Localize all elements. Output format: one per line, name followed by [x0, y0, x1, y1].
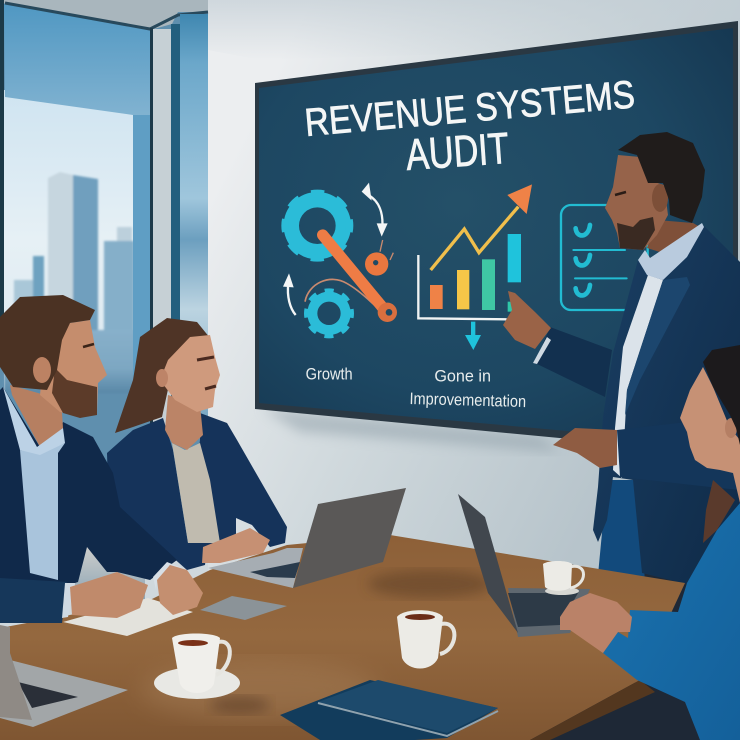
coffee cup centre [397, 610, 454, 668]
presenter neck [647, 220, 700, 253]
left woman hand [202, 528, 270, 563]
left woman eye and mouth [197, 357, 216, 389]
title: REVENUE SYSTEMS [303, 73, 637, 145]
sky through glass [4, 90, 150, 390]
presenter cuff [533, 337, 551, 364]
presenter face [605, 155, 668, 250]
label: growth: Growth [306, 364, 353, 383]
window [0, 0, 208, 563]
label: gone in: Gone in [434, 367, 491, 386]
trend line [431, 207, 518, 270]
label: improvementation: Improvementation [409, 389, 526, 411]
coffee [178, 640, 208, 646]
side reflection band [133, 115, 150, 395]
presenter collar [638, 223, 704, 280]
ceiling shadow on wall [208, 0, 740, 60]
laptop right [458, 494, 590, 637]
tablet [200, 596, 287, 620]
left man jacket [0, 387, 177, 623]
left man cuff two [153, 562, 187, 590]
table front edge [530, 680, 655, 740]
laptop keyboard [508, 593, 578, 627]
right woman lower hair [703, 480, 735, 543]
left man [0, 295, 177, 623]
presenter sleeve lower [617, 422, 740, 490]
trend arrowhead [507, 184, 532, 214]
presenter [503, 132, 740, 590]
cup body [543, 561, 572, 591]
laptop keyboard [250, 562, 300, 578]
window frame left [0, 0, 4, 320]
lower notebook [280, 680, 498, 740]
right woman hand [560, 593, 632, 653]
icon: orange nut [365, 240, 393, 276]
right woman [560, 345, 740, 740]
laptop lid [458, 494, 518, 633]
coffee cup front left [154, 634, 240, 699]
laptop base [508, 588, 590, 637]
left man neck [10, 385, 63, 447]
left man hand one [70, 572, 148, 618]
window frame top [0, 0, 208, 30]
presenter jacket [593, 225, 740, 590]
presenter beard [617, 217, 655, 250]
icon: gear connector arc [305, 279, 378, 308]
left woman ear [156, 369, 168, 387]
presenter sleeve raised [535, 327, 612, 397]
icon: curved arrows [283, 183, 388, 315]
right woman hair [703, 345, 740, 445]
icon: small gear [307, 291, 351, 336]
laptop lid [293, 488, 406, 588]
right woman face [680, 367, 740, 503]
table [0, 535, 685, 740]
saucer [154, 667, 240, 699]
presentation screen [255, 21, 738, 455]
down arrow [465, 322, 481, 350]
presenter lapel [625, 277, 690, 415]
screen surface [259, 28, 733, 446]
right woman jacket [603, 503, 740, 740]
left man collar [3, 387, 65, 455]
left man ear [33, 357, 51, 383]
left woman [107, 318, 287, 570]
window glass right [180, 14, 208, 424]
saucer [545, 587, 579, 595]
laptop keyboard [18, 682, 78, 708]
left woman neck [165, 395, 203, 450]
laptop left [0, 625, 128, 727]
city skyline [4, 172, 150, 563]
wall [208, 0, 740, 600]
screen bezel [255, 21, 738, 455]
glass overhang reflection [4, 2, 150, 118]
screen graphics [283, 183, 648, 411]
window mullion [150, 24, 180, 429]
gap under left man's arm [75, 540, 145, 600]
cup handle [216, 642, 230, 675]
cup handle [570, 566, 584, 588]
presenter hand pointing [503, 291, 551, 349]
screen shadow [262, 408, 560, 452]
icon: wrench [323, 235, 397, 322]
cup body [172, 634, 220, 693]
icon: large gear [285, 193, 350, 258]
presenter trousers [598, 480, 645, 585]
icon: checklist [561, 205, 648, 310]
laptop base [208, 548, 303, 588]
left man face [40, 320, 107, 417]
table shading [140, 570, 492, 720]
left woman jacket [107, 413, 287, 570]
laptop lid [0, 625, 32, 720]
cup body [397, 610, 443, 668]
dark floor beside table [500, 560, 740, 740]
cup handle [440, 624, 454, 654]
title line two: AUDIT [404, 124, 510, 180]
presenter eye [615, 192, 626, 195]
laptop centre [208, 488, 406, 588]
bar chart [418, 184, 532, 350]
presenter ear [652, 184, 668, 212]
presenter shirt [613, 275, 663, 478]
presenter hair [618, 132, 705, 223]
coffee [405, 614, 435, 620]
left man hair [0, 295, 95, 390]
presenter hand lower [553, 428, 617, 468]
right woman ear [725, 418, 737, 438]
left man shirt [20, 443, 65, 580]
left man eye [83, 344, 94, 347]
coffee cup back right [543, 561, 584, 595]
left man hand two [157, 565, 203, 615]
left woman top [172, 443, 220, 543]
notebook stack [280, 680, 498, 740]
notebook page edge [318, 703, 498, 736]
left man forearm [0, 578, 67, 623]
left woman hair [115, 318, 210, 433]
laptop base [0, 660, 128, 727]
upper notebook [318, 680, 498, 733]
left woman face [160, 335, 220, 412]
left man cuff [62, 583, 75, 618]
notepad [63, 598, 193, 636]
left man beard [52, 368, 97, 418]
